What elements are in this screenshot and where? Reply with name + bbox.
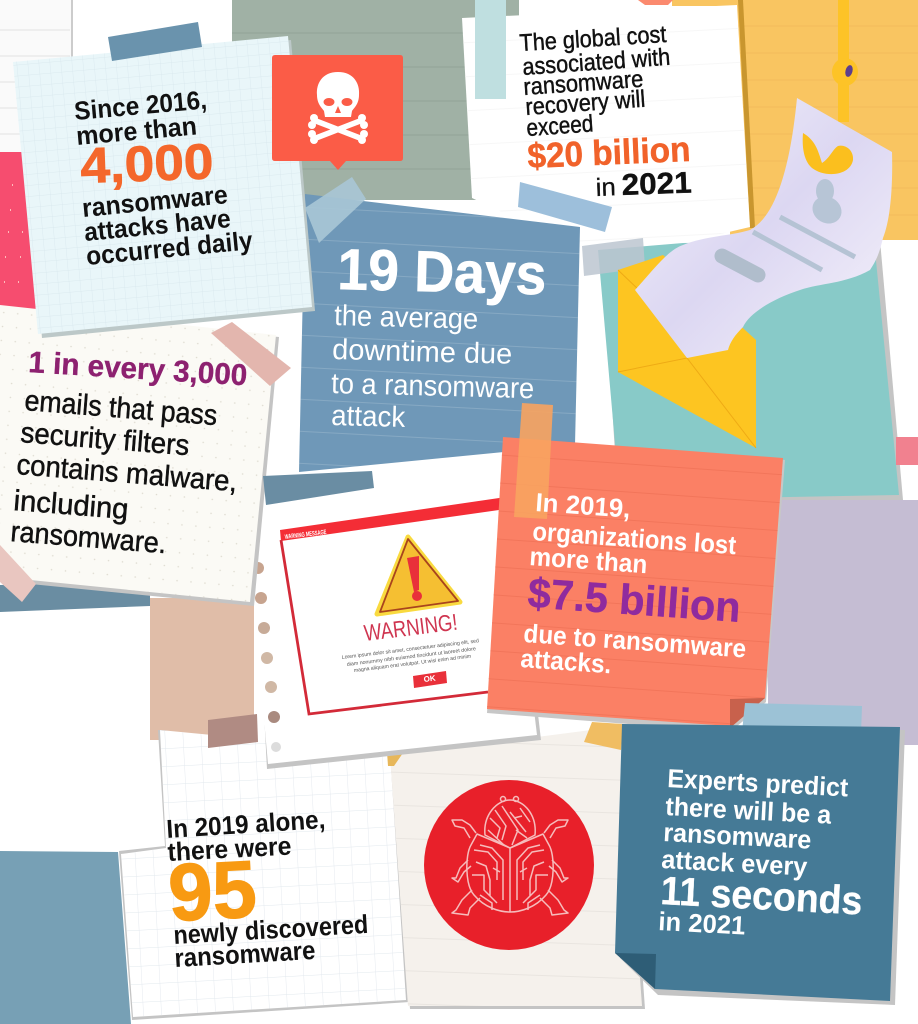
stat text: downtime due xyxy=(332,334,513,371)
stat text: attacks have xyxy=(83,203,232,247)
stat text: attacks. xyxy=(520,643,612,679)
tape: blue over dark note xyxy=(742,703,862,734)
stat text: there were xyxy=(167,831,292,867)
stat text: 95 xyxy=(166,844,259,939)
tape: blue over white note xyxy=(518,182,612,232)
tape: grey behind letter xyxy=(582,238,645,276)
tape: rose xyxy=(211,322,291,386)
stat text: newly discovered xyxy=(173,909,369,950)
tape: translucent blue xyxy=(305,177,366,243)
stat text: 11 seconds xyxy=(660,869,864,924)
warning body text: diam nonummy nibh euismod tincidunt ut laoreet dolore xyxy=(347,646,476,668)
illustration: phishing envelope and letter xyxy=(618,0,892,448)
OK button xyxy=(413,671,447,688)
stat text: exceed xyxy=(526,110,594,142)
window title: WARNING MESSAGE xyxy=(284,529,327,541)
stat text xyxy=(165,804,369,973)
stat text: ransomware xyxy=(174,935,316,973)
stat text: attack every xyxy=(661,844,809,882)
background paper: slate strip left xyxy=(0,582,150,612)
note: $20 billion global cost xyxy=(462,5,750,250)
tape: orange xyxy=(514,403,553,519)
warning window xyxy=(280,497,510,716)
stat text: to a ransomware xyxy=(331,368,535,405)
tape: teal top xyxy=(475,0,506,99)
warning body text: Lorem ipsum dolor sit amet, consectetuer adipiscing elit, sed xyxy=(342,638,479,661)
stat text: more than xyxy=(529,541,648,579)
tape: pink edge right xyxy=(896,437,918,465)
tape: dark blue xyxy=(263,471,374,505)
stat text: recovery will xyxy=(525,86,646,121)
stat text: emails that pass xyxy=(23,385,218,432)
background paper: peach sheet xyxy=(150,598,254,740)
background paper: top-left ruled sheet xyxy=(0,0,73,155)
folded corner xyxy=(730,698,765,728)
background sheet: warning paper xyxy=(254,470,541,769)
stat text: due to ransomware xyxy=(523,618,747,664)
stat text: ransomware xyxy=(523,66,644,101)
stat text: 2021 xyxy=(621,167,692,202)
icon: skull and crossbones marker xyxy=(272,55,403,170)
tape: dark rose on peach xyxy=(208,714,258,748)
letter xyxy=(635,98,892,358)
warning body text xyxy=(342,638,479,674)
stat text xyxy=(519,21,692,202)
punched holes xyxy=(252,562,281,752)
stat text: associated with xyxy=(522,44,671,81)
stat text: ransomware xyxy=(81,179,229,223)
note: 95 newly discovered xyxy=(119,730,410,1020)
stat text: The global cost xyxy=(519,21,667,57)
icon: warning triangle xyxy=(377,537,460,614)
warning body text: magna aliquam erat volutpat. Ut wisi enim ad minim xyxy=(354,654,471,674)
stat text: contains malware, xyxy=(15,449,238,498)
stat text: ransomware. xyxy=(9,516,167,560)
stat text: in xyxy=(595,173,616,202)
note: 11 seconds xyxy=(615,724,905,1005)
stat text: organizations lost xyxy=(532,516,737,560)
note: 1 in every 3,000 emails xyxy=(0,305,279,606)
stat text xyxy=(658,763,864,941)
folded corner xyxy=(615,953,656,989)
fishing line xyxy=(832,0,858,122)
stat text xyxy=(73,84,254,271)
note: $7.5 billion lost xyxy=(487,403,785,732)
background paper: blue sheet bottom-left xyxy=(0,851,160,1024)
tape: small gold corner xyxy=(387,750,405,766)
stat text: including xyxy=(12,485,130,526)
note: beige ruled sheet with bug xyxy=(390,726,645,1009)
stat text: 1 in every 3,000 xyxy=(28,346,248,392)
stat text: $20 billion xyxy=(527,130,691,176)
note: 4,000 attacks daily xyxy=(13,22,315,338)
warning heading: WARNING! xyxy=(362,609,459,646)
stat text xyxy=(9,346,248,560)
background paper: teal sheet xyxy=(598,240,903,502)
stat text: occurred daily xyxy=(85,225,254,271)
stat text xyxy=(331,237,547,434)
background paper: yellow ruled sheet xyxy=(638,0,918,240)
stat text: In 2019, xyxy=(535,487,631,524)
stat text: 4,000 xyxy=(79,133,214,194)
stat text: attack xyxy=(331,400,406,434)
OK button: OK xyxy=(423,674,436,684)
stat text: security filters xyxy=(19,417,190,462)
stat text xyxy=(520,487,747,679)
tape: top xyxy=(108,22,202,61)
tape: blush corner xyxy=(0,545,36,602)
background paper: lilac sheet xyxy=(768,500,918,745)
stat text: more than xyxy=(75,111,198,151)
stat text: ransomware xyxy=(663,817,812,855)
note: 19 days downtime xyxy=(299,194,580,472)
icon: circuit bug xyxy=(424,780,594,950)
background paper: sage ruled sheet xyxy=(232,0,519,200)
stat text: $7.5 billion xyxy=(526,569,742,631)
stat text: in 2021 xyxy=(658,906,746,941)
stat text: In 2019 alone, xyxy=(165,804,326,844)
stat text: there will be a xyxy=(665,791,833,830)
stat text: Since 2016, xyxy=(73,84,208,126)
envelope body xyxy=(618,255,756,448)
stat text: 19 Days xyxy=(337,237,547,307)
stat text: Experts predict xyxy=(667,763,849,802)
background paper: pink sheet xyxy=(0,152,36,310)
stat text: the average xyxy=(334,300,479,336)
tape: gold under orange note xyxy=(584,722,623,750)
